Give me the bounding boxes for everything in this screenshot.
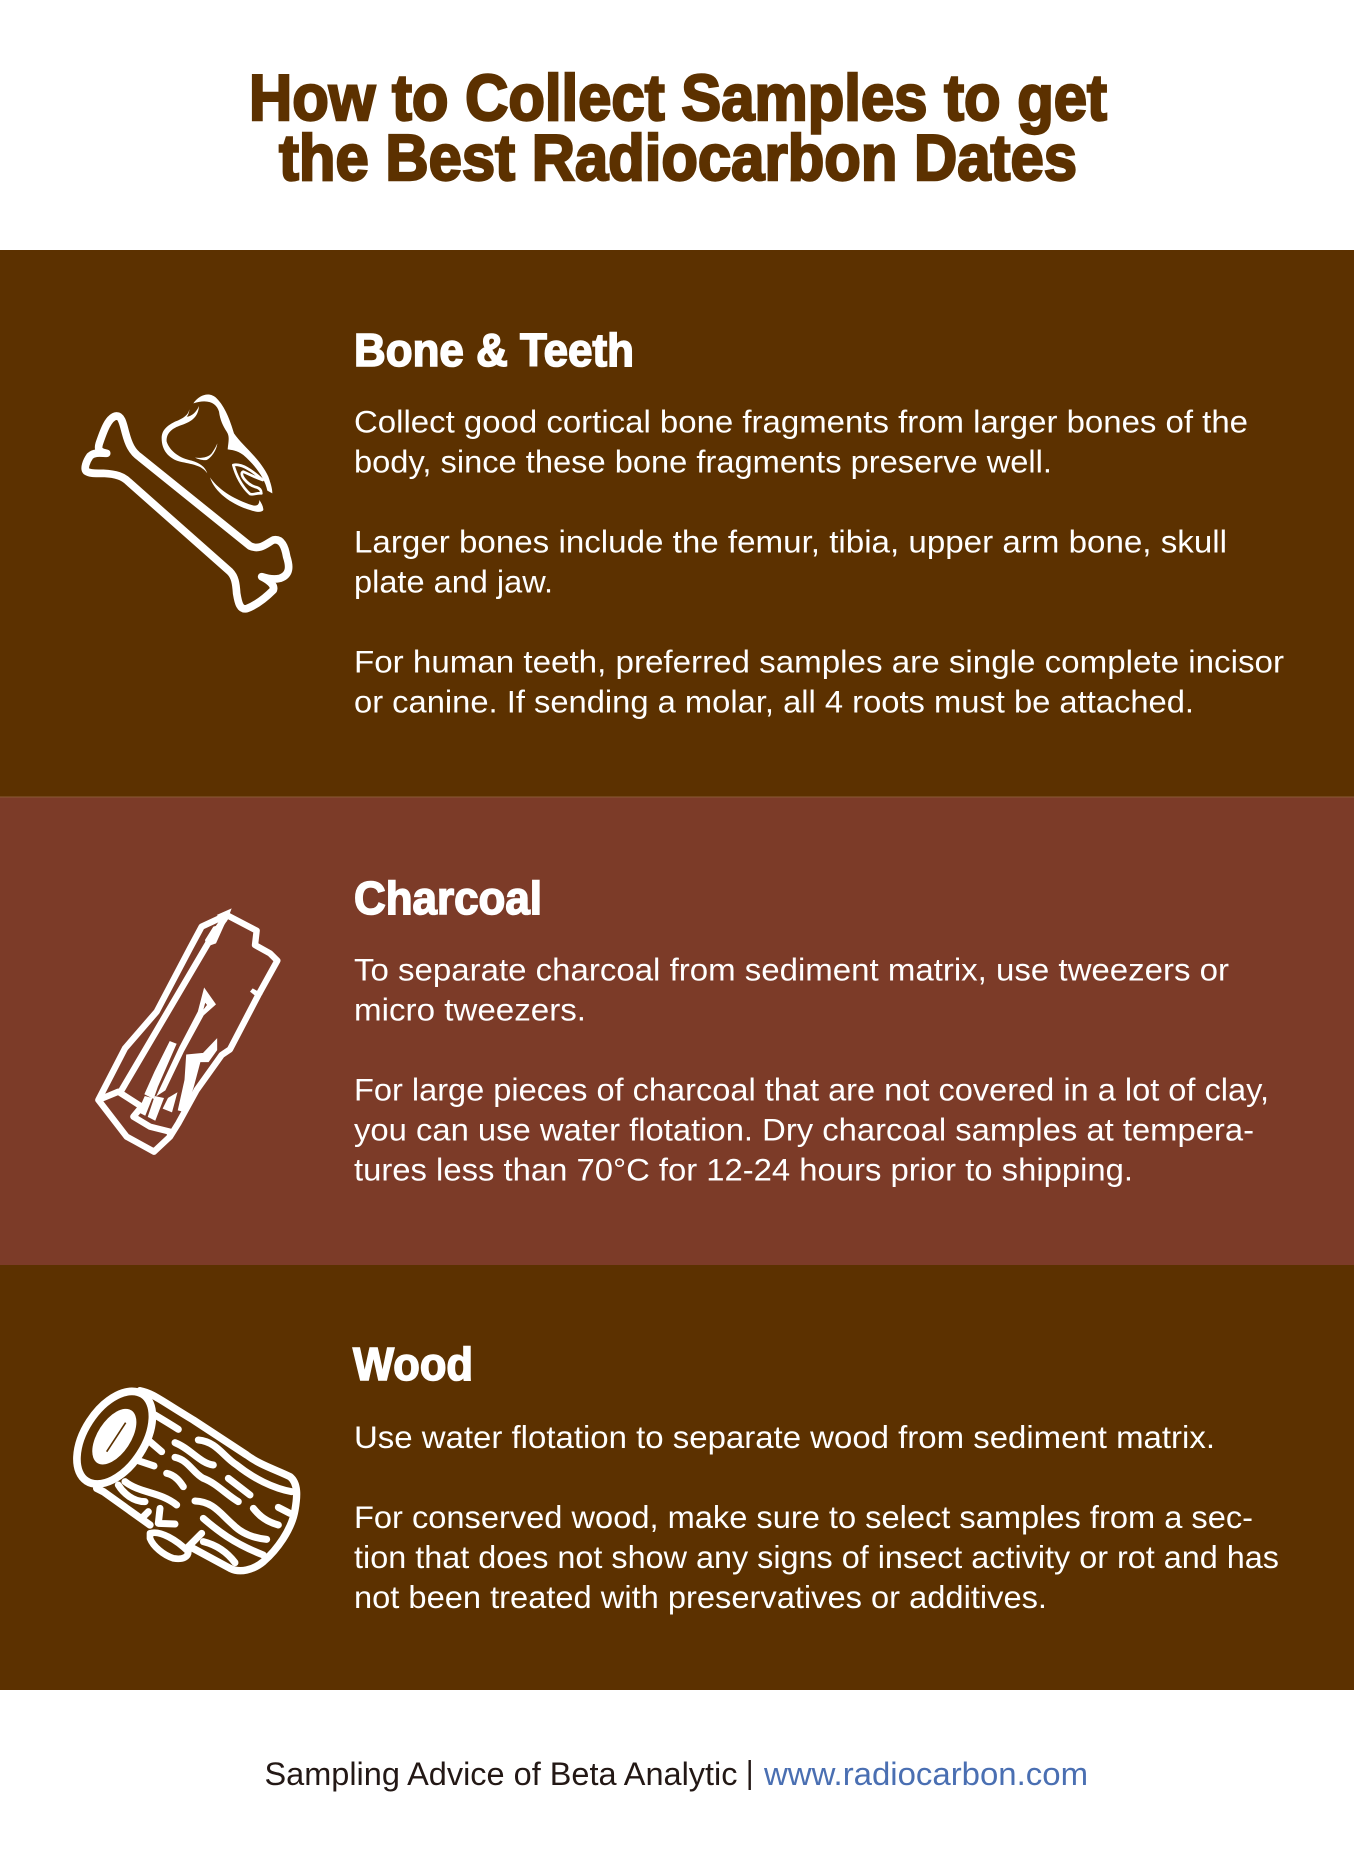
panel: charcoal	[0, 796, 1354, 1265]
title: How to Collect Samples to get	[249, 61, 1107, 134]
panel: wood	[0, 1265, 1354, 1690]
text block: bone and teeth advice: Collect good cortical bone fragments from larger bones of the	[354, 403, 1248, 439]
text block: bone and teeth advice: Larger bones include the femur, tibia, upper arm bone, skull	[354, 523, 1227, 559]
text block: bone and teeth advice: For human teeth, preferred samples are single complete incisor	[354, 643, 1284, 679]
footer credit	[264, 1756, 1088, 1792]
title	[249, 61, 1107, 194]
text block: charcoal advice: you can use water flotation. Dry charcoal samples at tempera-	[354, 1112, 1254, 1148]
text block: wood advice: not been treated with preservatives or additives.	[354, 1579, 1047, 1615]
text block: charcoal advice: micro tweezers.	[354, 992, 586, 1028]
heading: wood: Wood	[353, 1338, 473, 1390]
icon: charcoal	[98, 908, 277, 1152]
text block: bone and teeth advice	[354, 403, 1284, 719]
text block: charcoal advice: tures less than 70°C for 12-24 hours prior to shipping.	[354, 1152, 1133, 1188]
panel: bone and teeth	[0, 250, 1354, 797]
heading: bone and teeth: Bone & Teeth	[354, 324, 634, 376]
heading: charcoal: Charcoal	[354, 872, 542, 924]
text block: wood advice: For conserved wood, make sure to select samples from a sec-	[354, 1499, 1253, 1535]
text block: wood advice: Use water flotation to separate wood from sediment matrix.	[354, 1419, 1215, 1455]
footer credit: Sampling Advice of Beta Analytic	[264, 1756, 738, 1792]
text block: wood advice	[354, 1419, 1279, 1615]
icon: wood log	[61, 1378, 297, 1571]
icon: bone and tooth	[85, 395, 289, 609]
text block: bone and teeth advice: or canine. If sending a molar, all 4 roots must be attached.	[354, 683, 1194, 719]
text block: charcoal advice	[354, 952, 1269, 1188]
text block: charcoal advice: To separate charcoal from sediment matrix, use tweezers or	[354, 952, 1229, 988]
title: the Best Radiocarbon Dates	[279, 121, 1077, 194]
text block: bone and teeth advice: body, since these bone fragments preserve well.	[354, 443, 1052, 479]
text block: bone and teeth advice: plate and jaw.	[354, 563, 553, 599]
text block: charcoal advice: For large pieces of charcoal that are not covered in a lot of clay,	[354, 1072, 1269, 1108]
text block: wood advice: tion that does not show any signs of insect activity or rot and has	[354, 1539, 1279, 1575]
footer credit: www.radiocarbon.com	[763, 1756, 1088, 1792]
